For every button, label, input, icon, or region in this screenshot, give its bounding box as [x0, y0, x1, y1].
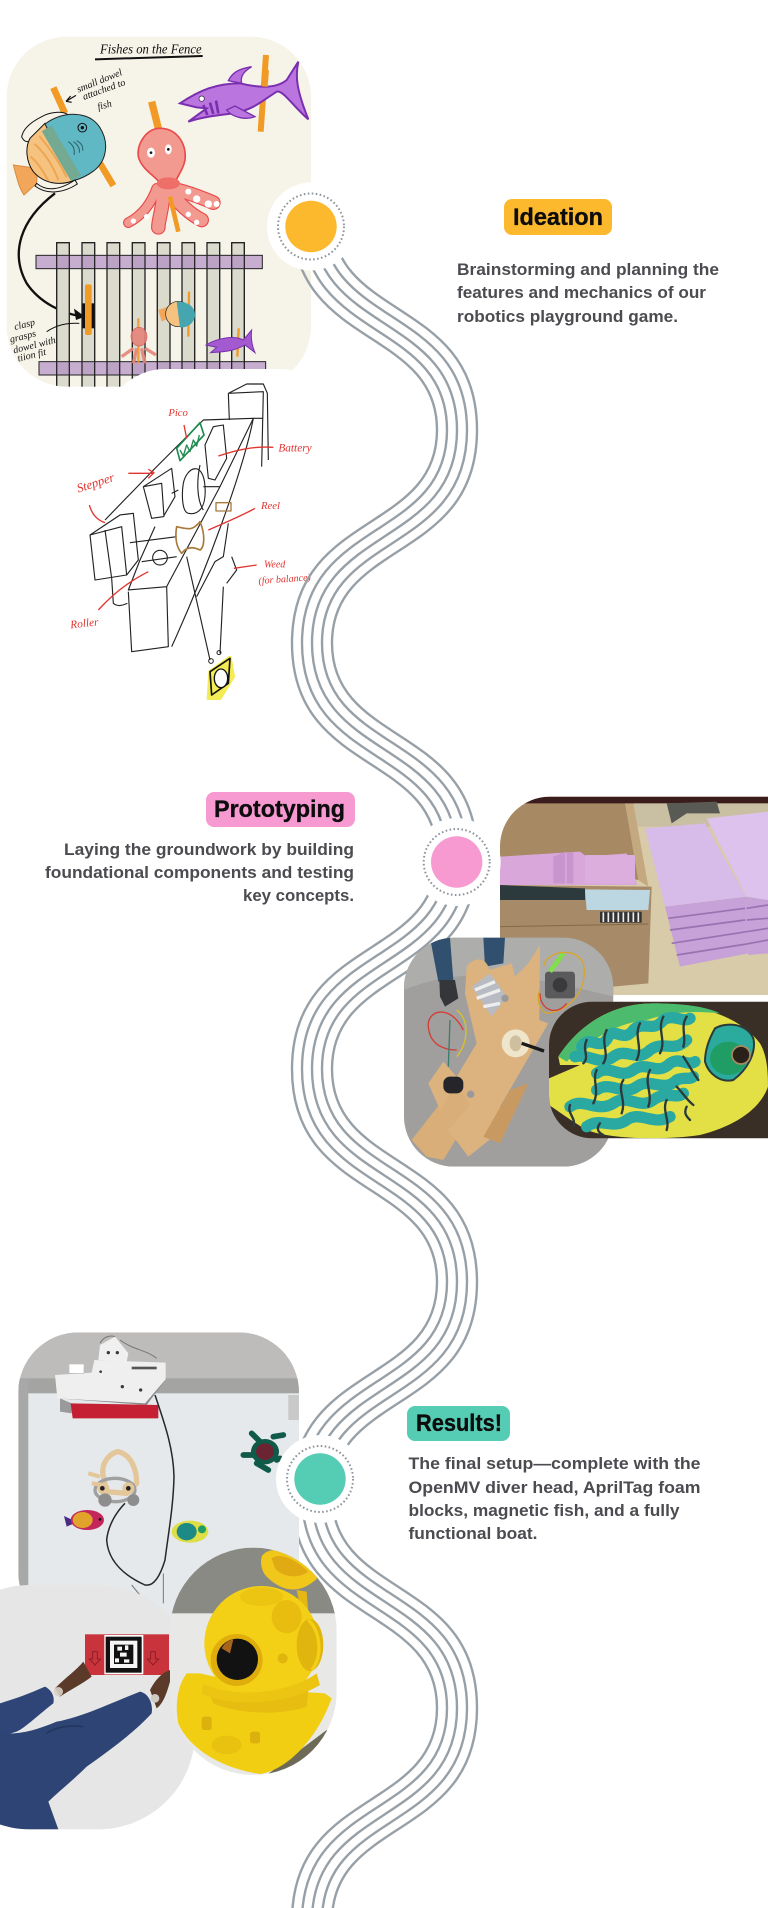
wires	[107, 1395, 174, 1585]
helmet base	[177, 1673, 332, 1774]
heading: Ideation: Ideation	[513, 204, 603, 231]
clasp annotation	[10, 320, 80, 362]
dowel annotation	[66, 67, 127, 113]
heading: Prototyping: Prototyping	[214, 796, 345, 823]
boat	[55, 1336, 167, 1418]
text: Results description: blocks, magnetic fish, and a fully	[408, 1502, 680, 1520]
text: Results description: OpenMV diver head, AprilTag foam	[408, 1479, 700, 1497]
milestone marker: Results	[276, 1435, 364, 1523]
icon: octopus	[128, 102, 220, 232]
sketch: red labels: Pico	[167, 408, 189, 419]
diver ring	[88, 1452, 139, 1507]
heading: Prototyping	[206, 792, 355, 827]
milestone marker: Prototyping	[413, 818, 501, 906]
clasp annotation: grasps	[9, 328, 37, 346]
icon: small fish on fence	[158, 292, 195, 337]
red fish	[64, 1510, 104, 1530]
clasp annotation: tiion fit	[16, 347, 48, 365]
panel: mechanism sketch	[69, 369, 340, 709]
clasp and dowel	[82, 284, 94, 335]
arrow: fish to clasp	[19, 193, 85, 320]
helmet hatch	[261, 1550, 317, 1613]
milestone marker: Ideation	[267, 182, 355, 270]
text: Ideation description: features and mechanics of our	[457, 284, 707, 302]
turtle	[243, 1433, 283, 1470]
sketch: red leader lines	[89, 425, 273, 610]
icon: small octopus on fence	[122, 318, 156, 363]
text: Results description	[408, 1455, 700, 1543]
text: Results description: functional boat.	[408, 1525, 538, 1543]
text: Ideation description: Brainstorming and planning the	[457, 261, 719, 279]
sketch: reel and pico	[176, 423, 231, 553]
sketch: red labels	[69, 408, 313, 631]
sketch: yellow weight	[208, 651, 233, 698]
helmet dome	[202, 1586, 323, 1702]
text: Prototyping description: Laying the groundwork by building	[64, 841, 354, 859]
text: Ideation description	[457, 261, 719, 326]
heading: Ideation	[504, 199, 612, 235]
text: Ideation description: robotics playground game.	[457, 308, 678, 326]
clasp annotation: clasp	[13, 317, 36, 333]
text: Prototyping description	[45, 841, 354, 905]
sketch: red labels: Stepper	[75, 470, 116, 496]
photo: hands holding AprilTag foam block	[0, 1585, 197, 1830]
icon: purple shark	[180, 55, 308, 132]
sketch: red labels: (for balance)	[258, 572, 312, 587]
photo: foam blocks in a cardboard box	[500, 797, 768, 997]
sketch: red labels: Weed	[264, 559, 286, 570]
text: Prototyping description: key concepts.	[243, 887, 354, 905]
dowel annotation: small dowel	[75, 67, 124, 95]
photo: wooden reel prototype with stepper motor	[404, 938, 613, 1167]
green fish	[172, 1521, 208, 1543]
photo: painted magnetic fish	[549, 1002, 768, 1138]
sketch: red labels: Battery	[278, 443, 313, 455]
text: Results description: The final setup—complete with the	[408, 1455, 700, 1473]
dowel annotation: attached to	[81, 77, 127, 103]
text: Prototyping description: foundational components and testing	[45, 864, 354, 882]
dowel annotation: fish	[96, 99, 113, 113]
icon: small shark on fence	[206, 328, 255, 357]
clasp annotation: dowel with	[12, 335, 57, 356]
icon: teal fish	[13, 88, 113, 195]
fence illustration	[36, 243, 266, 389]
winding timeline path	[292, 217, 477, 1908]
sketch: red labels: Reel	[260, 501, 280, 512]
sketch: frame body	[90, 384, 268, 660]
sketch title: Fishes on the Fence	[99, 41, 202, 56]
panel: game concept sketch	[7, 37, 311, 389]
photo: yellow 3D-printed diver helmet	[170, 1548, 337, 1777]
heading: Results!: Results!	[416, 1410, 502, 1437]
sketch: red labels: Roller	[69, 616, 100, 631]
photo: final setup on whiteboard	[18, 1332, 299, 1633]
